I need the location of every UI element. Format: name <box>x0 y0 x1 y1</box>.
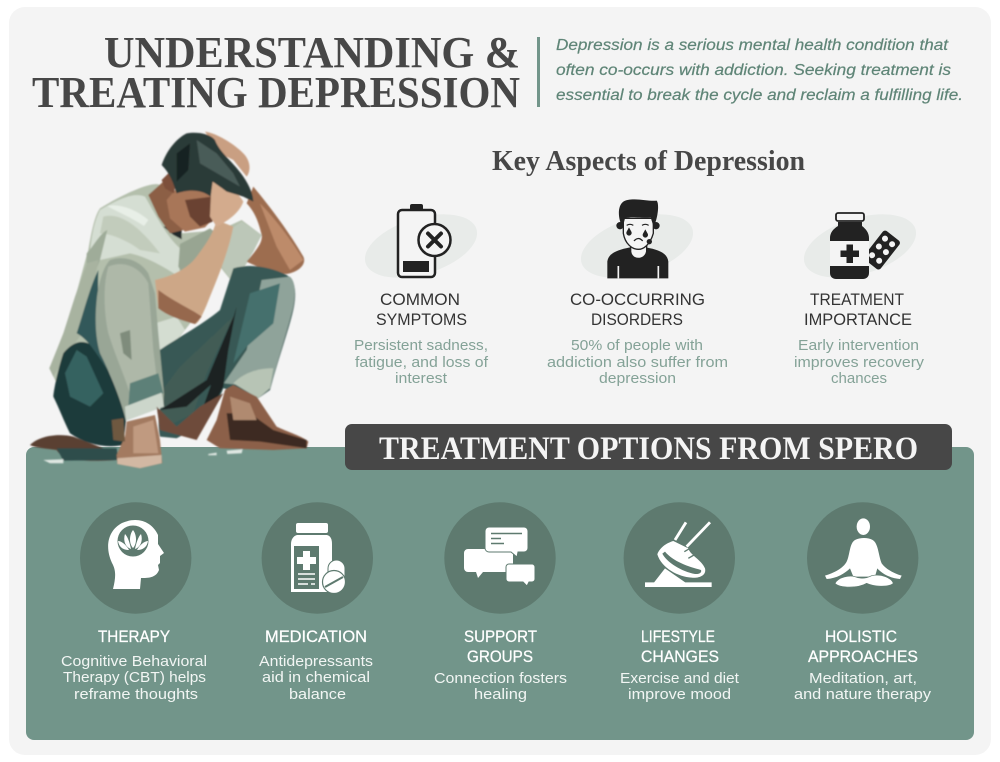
icon: meditating figure <box>807 502 918 614</box>
label: co-occurring disorders: CO-OCCURRING <box>570 291 705 309</box>
label: support groups <box>464 628 537 666</box>
icon: crying person <box>573 199 701 290</box>
icon: low battery with x <box>357 202 485 290</box>
description: therapy: Cognitive Behavioral <box>61 653 207 670</box>
aspect: co-occurring disorders <box>547 199 728 387</box>
label: treatment importance: TREATMENT <box>810 291 904 309</box>
description: lifestyle changes: Exercise and diet <box>620 670 740 687</box>
description: therapy: reframe thoughts <box>74 686 198 703</box>
option: holistic approaches <box>794 502 932 703</box>
label: treatment importance <box>804 291 912 329</box>
label: co-occurring disorders <box>570 291 705 329</box>
option: therapy <box>61 502 207 703</box>
description: common symptoms <box>354 337 489 387</box>
description: medication <box>259 653 373 703</box>
label: holistic approaches: APPROACHES <box>808 648 918 666</box>
description: therapy <box>61 653 207 703</box>
description: medication: aid in chemical <box>262 669 370 686</box>
description: co-occurring disorders: addiction also suffer from <box>547 354 728 371</box>
description: therapy: Therapy (CBT) helps <box>63 669 206 686</box>
label: common symptoms: COMMON <box>380 291 460 309</box>
description: treatment importance <box>794 337 925 387</box>
aspect: common symptoms <box>354 202 489 387</box>
description: treatment importance: chances <box>831 370 887 387</box>
label: lifestyle changes: LIFESTYLE <box>641 628 715 646</box>
title <box>32 28 520 117</box>
description: holistic approaches <box>794 670 932 703</box>
description: co-occurring disorders <box>547 337 728 387</box>
intro text: Depression is a serious mental health condition that <box>556 37 949 54</box>
label: lifestyle changes <box>641 628 719 666</box>
icon: running shoe on incline <box>624 502 735 614</box>
description: co-occurring disorders: 50% of people with <box>571 337 703 354</box>
heading: key aspects: Key Aspects of Depression <box>492 146 805 177</box>
description: lifestyle changes <box>620 670 740 703</box>
title: TREATING DEPRESSION <box>32 68 520 117</box>
description: support groups: healing <box>474 686 527 703</box>
label: lifestyle changes: CHANGES <box>641 648 719 666</box>
illustration: seated man holding his head <box>30 132 308 468</box>
description: medication: balance <box>289 686 346 703</box>
label: support groups: SUPPORT <box>464 628 537 646</box>
icon: speech bubbles <box>444 502 556 614</box>
label: support groups: GROUPS <box>467 648 533 666</box>
description: support groups: Connection fosters <box>434 670 567 687</box>
panel: treatment options <box>26 447 974 740</box>
label: common symptoms: SYMPTOMS <box>376 311 467 329</box>
description: common symptoms: Persistent sadness, <box>354 337 488 354</box>
label: common symptoms <box>376 291 467 329</box>
option: medication <box>259 502 373 703</box>
description: treatment importance: Early intervention <box>798 337 919 354</box>
option: support groups <box>434 502 567 703</box>
label: medication: MEDICATION <box>265 628 367 646</box>
label: co-occurring disorders: DISORDERS <box>591 311 683 329</box>
label: therapy: THERAPY <box>98 628 170 646</box>
label: holistic approaches: HOLISTIC <box>825 628 897 646</box>
label: treatment importance: IMPORTANCE <box>804 311 912 329</box>
intro text: essential to break the cycle and reclaim a fulfilling life. <box>556 87 963 104</box>
description: co-occurring disorders: depression <box>599 370 676 387</box>
label: holistic approaches <box>808 628 918 666</box>
description: common symptoms: interest <box>395 370 448 387</box>
option: lifestyle changes <box>620 502 740 703</box>
description: holistic approaches: and nature therapy <box>794 686 932 703</box>
description: support groups <box>434 670 567 703</box>
intro text: often co-occurs with addiction. Seeking treatment is <box>556 62 951 79</box>
description: medication: Antidepressants <box>259 653 373 670</box>
banner: treatment options from spero: TREATMENT OPTIONS FROM SPERO <box>379 431 918 467</box>
icon: bottle and pills <box>262 502 373 614</box>
description: holistic approaches: Meditation, art, <box>809 670 917 687</box>
intro text <box>537 37 963 107</box>
icon: medicine bottle and blister pack <box>796 202 924 290</box>
description: common symptoms: fatigue, and loss of <box>355 354 489 371</box>
aspect: treatment importance <box>794 202 925 387</box>
title: UNDERSTANDING & <box>104 28 520 77</box>
description: lifestyle changes: improve mood <box>628 686 731 703</box>
description: treatment importance: improves recovery <box>794 354 925 371</box>
icon: head with lotus <box>80 502 191 614</box>
